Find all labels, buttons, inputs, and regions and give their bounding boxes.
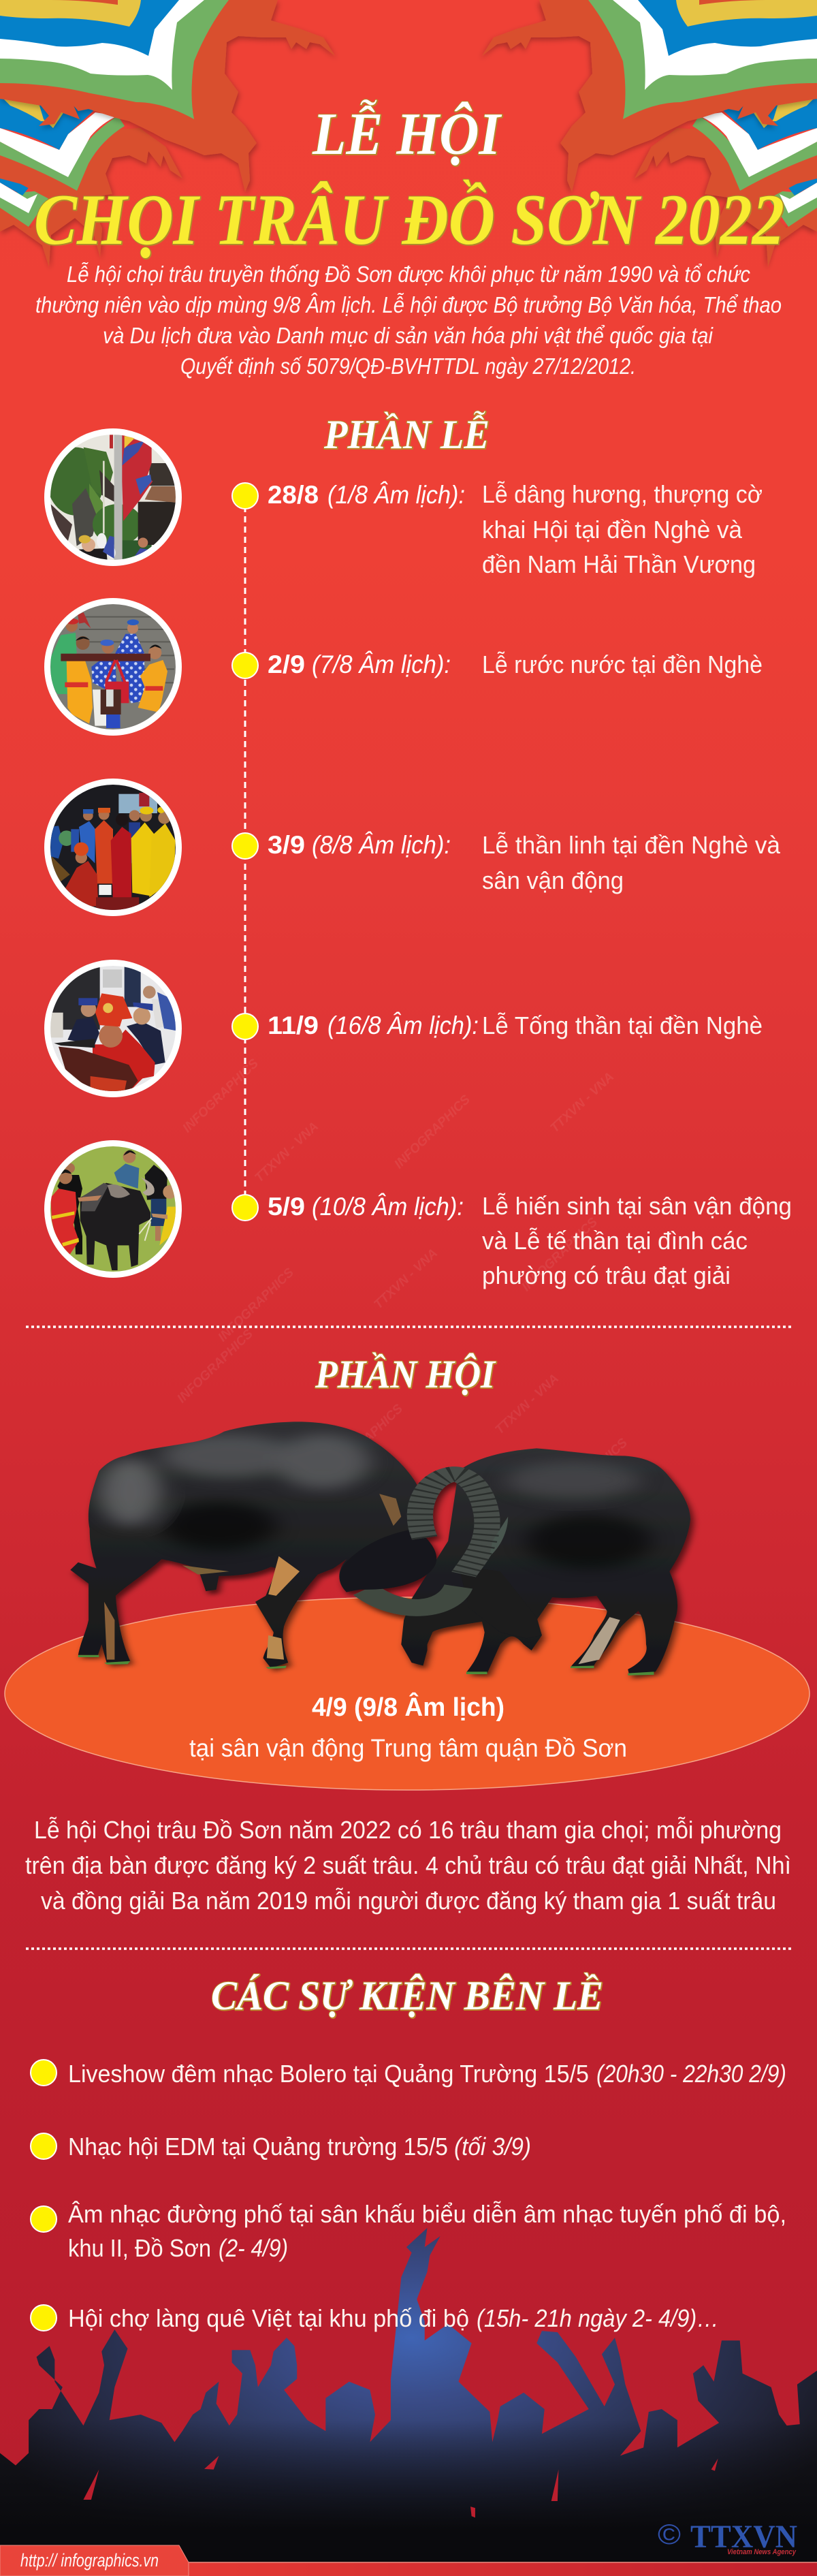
- date: 2/9: [268, 650, 305, 678]
- event 3: khu II, Đồ Sơn: [68, 2234, 211, 2262]
- description: đền Nam Hải Thần Vương: [482, 550, 756, 578]
- paragraph: festival rules: và đồng giải Ba năm 2019 mỗi người được đăng ký tham gia 1 suất trâu: [41, 1887, 776, 1915]
- photo: buffalo and handlers: [38, 1134, 188, 1284]
- date: (10/8 Âm lịch):: [312, 1193, 464, 1221]
- description: và Lễ tế thần tại đình các: [482, 1227, 748, 1255]
- description: Lễ dâng hương, thượng cờ: [482, 480, 763, 508]
- date: 3/9: [268, 831, 305, 859]
- date: [268, 1011, 479, 1039]
- photo: officiant reading: [44, 960, 182, 1097]
- date: (7/8 Âm lịch):: [312, 650, 451, 678]
- bullet: [232, 653, 258, 678]
- bullet: [232, 1014, 258, 1039]
- description: sân vận động: [482, 866, 624, 894]
- arena ellipse: [5, 1597, 810, 1790]
- description: Lễ rước nước tại đền Nghè: [482, 650, 763, 678]
- ring horn: [420, 1474, 487, 1575]
- logo: TTXVN: ©: [658, 2518, 681, 2550]
- date: 28/8: [268, 481, 319, 509]
- date: (16/8 Âm lịch):: [327, 1011, 479, 1039]
- description: Lễ thần linh tại đền Nghè và: [482, 831, 781, 859]
- description: phường có trâu đạt giải: [482, 1261, 731, 1289]
- bullet: [232, 833, 258, 859]
- corner decoration: left banners and dragon: [0, 0, 335, 267]
- logo: TTXVN: [658, 2518, 797, 2556]
- description: [482, 480, 763, 578]
- paragraph: festival rules: [25, 1816, 791, 1915]
- panel: ceremony 2: [38, 592, 763, 742]
- date: (8/8 Âm lịch):: [312, 831, 451, 859]
- left body highlights: [99, 1434, 370, 1550]
- horn and head of right buffalo: [458, 1565, 542, 1638]
- event 2: Nhạc hội EDM tại Quảng trường 15/5: [68, 2133, 448, 2161]
- panel: side events list: [31, 2060, 786, 2332]
- event 1: Liveshow đêm nhạc Bolero tại Quảng Trường 15/5: [68, 2060, 589, 2088]
- bullet: [232, 1195, 258, 1221]
- event 4: [31, 2304, 719, 2332]
- footer tab with URL: [0, 2545, 189, 2576]
- footer bar: [0, 2545, 817, 2576]
- paragraph: festival rules: trên địa bàn được đăng ký 2 suất trâu. 4 chủ trâu có trâu đạt giải Nhất, Nhì: [25, 1851, 791, 1879]
- left buffalo: [70, 1421, 422, 1668]
- watermarks: INFOGRAPHICS: [180, 1056, 261, 1135]
- event 3: [31, 2200, 786, 2262]
- photo: worship ceremony: [44, 779, 182, 916]
- right buffalo: [401, 1448, 690, 1676]
- photo: water procession: [44, 598, 182, 736]
- watermarks: INFOGRAPHICS: [324, 1402, 406, 1481]
- paragraph: festival rules: Lễ hội Chọi trâu Đồ Sơn năm 2022 có 16 trâu tham gia chọi; mỗi phường: [34, 1816, 782, 1844]
- intro text: Lễ hội chọi trâu truyền thống Đồ Sơn được khôi phục từ năm 1990 và tổ chức: [67, 262, 750, 287]
- crowd silhouette: [0, 2228, 817, 2576]
- description: [482, 1192, 792, 1289]
- logo: TTXVN: TTXVN: [690, 2519, 797, 2555]
- date: 5/9: [268, 1193, 305, 1221]
- watermarks: INFOGRAPHICS: [549, 1436, 630, 1515]
- watermarks: INFOGRAPHICS: [391, 1093, 473, 1172]
- horn grooves: [420, 1474, 487, 1575]
- watermarks: INFOGRAPHICS: [519, 1215, 600, 1294]
- title: [34, 99, 784, 260]
- right body highlights: [505, 1462, 652, 1569]
- illustration: two fighting buffaloes: [70, 1421, 690, 1676]
- watermarks: TTXVN - VNA: [371, 1246, 440, 1312]
- event 1: (20h30 - 22h30 2/9): [596, 2060, 786, 2088]
- panel: ceremony 1: [38, 422, 763, 578]
- bullet: [232, 483, 258, 509]
- event 4: Hội chợ làng quê Việt tại khu phố đi bộ: [68, 2304, 469, 2332]
- watermarks: INFOGRAPHICS: [215, 1266, 297, 1345]
- date: 11/9: [268, 1011, 319, 1039]
- ear: [379, 1494, 401, 1526]
- heading: side events: CÁC SỰ KIỆN BÊN LỀ: [211, 1973, 603, 2018]
- panel: ceremony 5: [38, 1134, 792, 1289]
- title: LỄ HỘI: [312, 99, 502, 168]
- description: [482, 831, 781, 894]
- heading: Phần hội: PHẦN HỘI: [315, 1352, 496, 1396]
- panel: ceremony 4: [38, 954, 763, 1103]
- description: Lễ Tống thần tại đền Nghè: [482, 1011, 763, 1039]
- watermarks: [174, 1056, 630, 1515]
- event 2: (tối 3/9): [454, 2133, 531, 2161]
- watermarks: TTXVN - VNA: [492, 1372, 562, 1437]
- intro text: và Du lịch đưa vào Danh mục di sản văn hóa phi vật thể quốc gia tại: [103, 323, 714, 348]
- event 3: Âm nhạc đường phố tại sân khấu biểu diễn âm nhạc tuyến phố đi bộ,: [68, 2200, 786, 2228]
- hoof grass: [78, 1655, 654, 1676]
- arena text: 4/9 (9/8 Âm lịch): [312, 1692, 504, 1722]
- date: [268, 481, 465, 509]
- photo: raising the flag: [44, 428, 182, 566]
- arena text: tại sân vận động Trung tâm quận Đồ Sơn: [189, 1734, 627, 1762]
- watermarks: TTXVN - VNA: [252, 1120, 321, 1185]
- timeline dashed line: [244, 496, 246, 1208]
- description: Lễ hiến sinh tại sân vận động: [482, 1192, 792, 1220]
- watermarks: TTXVN - VNA: [547, 1070, 617, 1135]
- logo: TTXVN: Vietnam News Agency: [727, 2548, 797, 2556]
- intro text: Quyết định số 5079/QĐ-BVHTTDL ngày 27/12/2012.: [180, 354, 636, 379]
- description: khai Hội tại đền Nghè và: [482, 516, 743, 544]
- heading: Phần lễ: PHẦN LỄ: [323, 411, 490, 457]
- head of left buffalo: [340, 1529, 436, 1592]
- corner decoration: right banners and dragon: [482, 0, 817, 267]
- date: (1/8 Âm lịch):: [327, 481, 465, 509]
- watermarks: INFOGRAPHICS: [174, 1327, 256, 1406]
- arena text: [189, 1692, 627, 1762]
- panel: ceremony 3: [38, 772, 781, 922]
- curved horn of right buffalo: [365, 1586, 458, 1607]
- footer tab with URL: http:// infographics.vn: [20, 2550, 159, 2571]
- event 4: (15h- 21h ngày 2- 4/9)…: [477, 2304, 719, 2332]
- tan leg markings: [268, 1556, 300, 1596]
- event 3: (2- 4/9): [219, 2234, 288, 2262]
- intro text: [35, 262, 782, 379]
